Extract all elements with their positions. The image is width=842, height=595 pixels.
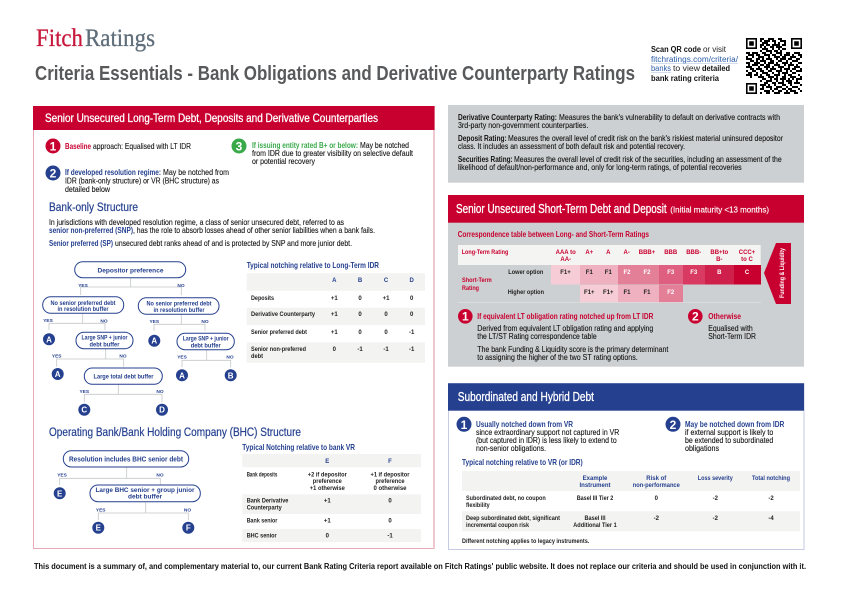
point 3: rated B+ or below: May be notched (360, 141, 409, 150)
point 1: baseline (46, 138, 191, 154)
flowchart: BHC structure: E (57, 489, 63, 498)
flowchart: bank-only structure: A (179, 371, 185, 380)
panel header: short-term debt: (Initial maturity <13 months) (670, 204, 769, 214)
table: long- and short-term correspondence: Long-Term Rating (462, 250, 509, 256)
table: typical notching relative to VR or IDR: incremental coupon risk (466, 523, 530, 529)
table: typical notching relative to bank VR: +1 (324, 499, 331, 505)
table: long- and short-term correspondence: AA- (560, 257, 571, 263)
table: long- and short-term correspondence: to C (741, 257, 753, 263)
flowchart: bank-only structure: A (46, 335, 52, 344)
table: typical notching relative to VR or IDR: flexibility (466, 503, 490, 509)
panel: rating definitions: Deposit Rating: (458, 134, 507, 143)
table: long- and short-term correspondence: F1+ (603, 290, 614, 296)
table: typical notching relative to long-term IDR: +1 (331, 312, 338, 318)
point 2: otherwise (688, 309, 756, 341)
panel: rating definitions: Measures the overall level of credit risk of the securities, including an assessment of the (514, 155, 782, 164)
table: typical notching relative to bank VR: 0 (388, 499, 392, 505)
flowchart: bank-only structure: NO (119, 354, 127, 360)
flowchart: bank-only structure: NO (177, 283, 185, 289)
table: typical notching relative to long-term IDR: C (384, 278, 389, 284)
flowchart: bank-only structure: Large total debt buffer (94, 374, 154, 380)
point 1: equivalent LT obligation rating: 1 (462, 310, 469, 324)
table: typical notching relative to VR or IDR: Typical notching relative to VR (or IDR) (462, 458, 583, 467)
table: typical notching relative to bank VR: Typical Notching relative to bank VR (242, 442, 355, 452)
heading: operating bank / BHC structure: Operating Bank/Bank Holding Company (BHC) Structure (49, 425, 301, 439)
point 2: developed resolution regime (46, 166, 229, 194)
panel: rating definitions: class. It includes an assessment of both default risk and potential recovery. (458, 142, 685, 151)
point 1: equivalent LT obligation rating: Derived from equivalent LT obligation rating and applying (477, 324, 653, 333)
table: typical notching relative to bank VR (242, 442, 421, 542)
table: long- and short-term correspondence: CCC+ (739, 250, 756, 256)
table: long- and short-term correspondence: F2 (623, 270, 631, 276)
table: typical notching relative to bank VR: Bank deposits (247, 472, 278, 478)
logo: Fitch Ratings (36, 25, 155, 52)
flowchart: bank-only structure: YES (52, 354, 62, 360)
table: typical notching relative to long-term IDR: Derivative Counterparty (251, 312, 316, 318)
table: typical notching relative to VR or IDR: Basel III Tier 2 (577, 496, 614, 502)
logo: Fitch Ratings: Fitch (36, 25, 83, 52)
table: typical notching relative to VR or IDR: -2 (768, 496, 774, 502)
point 1: baseline: approach: Equalised with LT IDR (93, 142, 191, 151)
table: long- and short-term correspondence: F1 (643, 290, 651, 296)
table: typical notching relative to long-term IDR: +1 (331, 296, 338, 302)
table: typical notching relative to VR or IDR: -2 (654, 516, 660, 522)
table: long- and short-term correspondence: F1+ (560, 270, 571, 276)
flowchart: bank-only structure: YES (149, 319, 160, 325)
point 3: rated B+ or below: from IDR due to greater visibility on selective default (252, 149, 414, 158)
table: typical notching relative to VR or IDR: Risk of (646, 476, 667, 482)
panel: rating definitions: likelihood of default/non-performance and, only for long-term ratings, of potential recoveries (458, 163, 742, 172)
point 2: otherwise: Otherwise (708, 312, 741, 321)
table: typical notching relative to long-term IDR: D (410, 278, 415, 284)
text block: bank-only structure (49, 218, 375, 248)
panel: rating definitions: 3rd-party non-government counterparties. (458, 121, 588, 130)
flowchart: BHC structure: YES (96, 508, 106, 514)
flowchart: bank-only structure: NO (226, 355, 234, 361)
table: long- and short-term correspondence: F3 (690, 270, 698, 276)
panel header: long-term debt: Senior Unsecured Long-Term Debt, Deposits and Derivative Counterparties (45, 111, 378, 125)
table: typical notching relative to VR or IDR: Subordinated debt, no coupon (466, 496, 546, 502)
point 2: developed resolution regime: IDR (bank-only structure) or VR (BHC structure) as (65, 176, 219, 186)
point 1: equivalent LT obligation rating (458, 309, 669, 362)
table: typical notching relative to long-term IDR: B (358, 278, 363, 284)
text block: bank-only structure: , has the role to absorb losses ahead of other senior liabilities when a bank fails. (133, 226, 375, 235)
panel: rating definitions (448, 105, 804, 183)
point 1: usually notched down from VR: (but captured in IDR) is less likely to extend to (476, 436, 617, 445)
table: long- and short-term correspondence: F1 (605, 270, 612, 276)
point 2: otherwise: 2 (692, 310, 699, 324)
flowchart: bank-only structure: C (81, 406, 87, 415)
table: long- and short-term correspondence: F2 (643, 270, 651, 276)
table: long- and short-term correspondence: F1 (586, 270, 593, 276)
panel: senior unsecured long-term debt (33, 106, 435, 549)
flowchart: bank-only structure: in resolution buffer (58, 307, 109, 313)
flowchart: bank-only structure: A (55, 370, 61, 379)
text block: bank-only structure: senior non-preferred (SNP) (49, 226, 133, 235)
table: long- and short-term correspondence: C (745, 270, 750, 276)
text block: bank-only structure: In jurisdictions with developed resolution regime, a class of senior unsecured debt, referred to as (49, 218, 344, 227)
table: typical notching relative to long-term IDR: Typical notching relative to Long-Term IDR (247, 260, 379, 270)
panel header: short-term debt: Senior Unsecured Short-Term Debt and Deposit (456, 201, 667, 216)
table: long- and short-term correspondence: Lower option (508, 270, 544, 276)
table: typical notching relative to long-term IDR: -1 (409, 347, 415, 353)
table: long- and short-term correspondence: Short-Term (462, 278, 492, 284)
panel: short-term debt and deposit (448, 195, 804, 367)
flowchart: bank-only structure (43, 262, 237, 416)
QR code caption: banks (651, 63, 671, 73)
point 3: rated B+ or below: 3 (236, 140, 243, 154)
point 1: usually notched down from VR (456, 417, 619, 453)
table: long- and short-term correspondence: A (606, 250, 611, 256)
flowchart: BHC structure: F (186, 524, 191, 533)
flowchart: bank-only structure: No senior preferred debt (50, 301, 116, 307)
point 2: may be notched down from IDR (666, 417, 784, 453)
table: long- and short-term correspondence: BB+to (710, 250, 729, 256)
table: long- and short-term correspondence: AAA to (556, 250, 576, 256)
table: typical notching relative to VR or IDR: Example (583, 476, 608, 482)
table: typical notching relative to bank VR: 0 (326, 534, 330, 540)
QR code caption: detailed (702, 63, 730, 73)
table: typical notching relative to bank VR: 0 otherwise (374, 486, 407, 492)
point 2: may be notched down from IDR: 2 (670, 418, 677, 432)
table: typical notching relative to VR or IDR: Total notching (752, 476, 790, 482)
table: typical notching relative to long-term IDR: Senior preferred debt (251, 330, 307, 336)
table: long- and short-term correspondence: BBB (664, 250, 678, 256)
arrow: funding and liquidity: Funding & Liquidity (779, 248, 786, 298)
flowchart: BHC structure: NO (184, 508, 191, 514)
table: long- and short-term correspondence: B- (716, 257, 722, 263)
panel header: long-term debt (33, 106, 434, 130)
text block: bank-only structure: unsecured debt ranks ahead of and is protected by SNP and more junior debt. (115, 239, 352, 248)
panel header: short-term debt (448, 195, 804, 223)
point 1: usually notched down from VR: Usually notched down from VR (476, 420, 573, 429)
table: typical notching relative to long-term IDR: 0 (358, 330, 362, 336)
flowchart: BHC structure: Large BHC senior + group junior (96, 487, 195, 494)
table: typical notching relative to bank VR: Bank Derivative (247, 499, 289, 505)
QR code caption: fitchratings.com/criteria/ (651, 54, 739, 64)
point 2: developed resolution regime: May be notched from (163, 168, 229, 177)
flowchart: bank-only structure: NO (156, 389, 164, 395)
point 2: developed resolution regime: detailed below (65, 185, 110, 194)
table: long- and short-term correspondence: A+ (585, 250, 594, 256)
point 2: developed resolution regime: 2 (50, 166, 57, 180)
panel: rating definitions: Measures the bank's vulnerability to default on derivative contracts with (559, 113, 780, 122)
table: typical notching relative to long-term IDR: -1 (383, 347, 389, 353)
table: typical notching relative to bank VR: F (388, 459, 392, 465)
arrow: funding and liquidity (764, 243, 791, 304)
table: typical notching relative to bank VR: BHC senior (247, 534, 277, 540)
flowchart: bank-only structure: Large SNP + junior (183, 336, 229, 342)
point 2: otherwise: Equalised with (708, 324, 753, 333)
table: typical notching relative to bank VR: +2 if depositor (308, 472, 347, 478)
panel header: subordinated debt: Subordinated and Hybrid Debt (458, 389, 594, 404)
flowchart: bank-only structure: A (151, 337, 157, 346)
table: typical notching relative to bank VR: Counterparty (247, 506, 282, 512)
table: typical notching relative to bank VR: +1 (324, 519, 331, 525)
point 1: usually notched down from VR: non-senior obligations. (476, 444, 546, 453)
flowchart: bank-only structure: YES (79, 389, 90, 395)
table: typical notching relative to long-term IDR: 0 (384, 312, 388, 318)
table: long- and short-term correspondence: F1+ (584, 290, 595, 296)
flowchart: BHC structure: debt buffer (128, 494, 162, 501)
QR code caption: or visit (703, 44, 727, 54)
point 2: may be notched down from IDR: May be notched down from IDR (685, 420, 784, 429)
flowchart: BHC structure: Resolution includes BHC senior debt (69, 457, 184, 464)
table: typical notching relative to VR or IDR: 0 (655, 496, 659, 502)
table: typical notching relative to long-term IDR: 0 (384, 330, 388, 336)
flowchart: bank-only structure: B (228, 371, 234, 380)
table: typical notching relative to bank VR: E (325, 459, 329, 465)
panel: rating definitions: Measures the overall level of credit risk on the bank's riskiest material uninsured depositor (508, 134, 783, 143)
table: typical notching relative to VR or IDR: -2 (713, 496, 719, 502)
panel: subordinated and hybrid debt (448, 383, 804, 550)
point 1: equivalent LT obligation rating: If equivalent LT obligation rating notched up from LT IDR (477, 312, 653, 321)
point 2: developed resolution regime: If developed resolution regime: (65, 168, 161, 177)
QR code caption: bank rating criteria (651, 73, 719, 83)
flowchart: bank-only structure: No senior preferred debt (146, 302, 212, 308)
flowchart: BHC structure: NO (156, 473, 164, 479)
QR code caption (651, 44, 739, 83)
table: long- and short-term correspondence: F3 (667, 270, 675, 276)
table: typical notching relative to VR or IDR (462, 458, 800, 545)
flowchart: bank-only structure: NO (100, 318, 108, 324)
heading: bank-only structure: Bank-only Structure (49, 200, 138, 214)
table: typical notching relative to bank VR: 0 (388, 519, 392, 525)
table: long- and short-term correspondence (458, 245, 761, 303)
table: typical notching relative to long-term IDR: A (332, 278, 337, 284)
table: typical notching relative to VR or IDR: Instrument (579, 483, 611, 489)
panel header: subordinated debt (448, 383, 804, 411)
flowchart: bank-only structure: YES (43, 318, 54, 324)
point 3: rated B+ or below (232, 138, 414, 166)
table: typical notching relative to VR or IDR: -4 (768, 516, 774, 522)
flowchart: bank-only structure: Depositor preference (98, 267, 164, 274)
QR code caption: Scan QR code (651, 44, 701, 54)
point 3: rated B+ or below: or potential recovery (252, 157, 315, 166)
table: typical notching relative to VR or IDR: Basel III (584, 516, 606, 522)
table: typical notching relative to long-term IDR: Senior non-preferred (251, 347, 306, 353)
table: typical notching relative to VR or IDR: -2 (713, 516, 719, 522)
table: typical notching relative to long-term IDR: 0 (410, 296, 414, 302)
table: long- and short-term correspondence: B (717, 270, 722, 276)
table: typical notching relative to VR or IDR: Deep subordinated debt, significant (466, 516, 560, 522)
flowchart: bank-only structure: debt buffer (191, 343, 221, 349)
panel: rating definitions: Derivative Counterparty Rating: (458, 113, 557, 122)
table: typical notching relative to bank VR: -1 (387, 534, 393, 540)
table: typical notching relative to long-term IDR: 0 (358, 312, 362, 318)
point 2: may be notched down from IDR: be extended to subordinated (685, 436, 773, 445)
table: long- and short-term correspondence: F2 (667, 290, 675, 296)
point 1: usually notched down from VR: 1 (461, 418, 468, 432)
QR code caption: to view (673, 63, 701, 73)
point 1: usually notched down from VR: since extraordinary support not captured in VR (476, 428, 619, 437)
table: typical notching relative to VR or IDR: Additional Tier 1 (573, 523, 617, 529)
point 1: equivalent LT obligation rating: to assigning the higher of the two ST rating options. (477, 353, 638, 362)
title: Criteria Essentials - Bank Obligations and Derivative Counterparty Ratings (35, 63, 635, 85)
table: typical notching relative to long-term IDR: +1 (331, 330, 338, 336)
table: typical notching relative to long-term IDR: Deposits (251, 296, 275, 302)
logo: Fitch Ratings: Ratings (85, 25, 155, 52)
table: typical notching relative to long-term IDR: 0 (358, 296, 362, 302)
table: typical notching relative to VR or IDR: non-performance (633, 483, 680, 489)
point 2: otherwise: Short-Term IDR (708, 332, 756, 341)
table: long- and short-term correspondence: F1 (623, 290, 631, 296)
flowchart: bank-only structure: NO (201, 319, 209, 325)
panel: rating definitions: Securities Rating: (458, 155, 513, 164)
point 2: may be notched down from IDR: obligations (685, 444, 719, 453)
table: long- and short-term correspondence: Rating (462, 286, 479, 292)
point 3: rated B+ or below: If issuing entity rated B+ or below: (252, 141, 358, 150)
table: typical notching relative to VR or IDR: Different notching applies to legacy instruments. (462, 539, 590, 545)
table: typical notching relative to long-term IDR: -1 (409, 330, 415, 336)
flowchart: BHC structure: E (96, 524, 102, 533)
flowchart: bank-only structure: Large SNP + junior (82, 336, 128, 342)
table: typical notching relative to VR or IDR: Loss severity (698, 476, 733, 482)
flowchart: bank-only structure: D (159, 406, 165, 415)
point 1: baseline: 1 (50, 140, 57, 154)
heading: correspondence table: Correspondence table between Long- and Short-Term Ratings (458, 230, 649, 239)
table: typical notching relative to bank VR: +1 otherwise (310, 486, 345, 492)
flowchart: bank-only structure: in resolution buffer (154, 308, 205, 314)
flowchart: BHC structure: YES (57, 473, 68, 479)
table: long- and short-term correspondence: BBB- (686, 250, 701, 256)
table: typical notching relative to bank VR: preference (313, 479, 342, 485)
point 2: may be notched down from IDR: if external support is likely to (685, 428, 774, 437)
icon: QR code (746, 38, 802, 94)
table: typical notching relative to long-term IDR: -1 (357, 347, 363, 353)
table: typical notching relative to long-term IDR: 0 (410, 312, 414, 318)
table: typical notching relative to long-term IDR: +1 (383, 296, 390, 302)
table: typical notching relative to bank VR: preference (376, 479, 405, 485)
flowchart: BHC structure (54, 451, 200, 534)
point 1: equivalent LT obligation rating: the LT/ST Rating correspondence table (477, 332, 597, 341)
table: long- and short-term correspondence: Higher option (508, 290, 544, 296)
point 1: equivalent LT obligation rating: The bank Funding & Liquidity score is the primary determinant (477, 345, 669, 354)
flowchart: bank-only structure: YES (177, 355, 188, 361)
table: typical notching relative to long-term IDR (247, 260, 425, 363)
table: typical notching relative to long-term IDR: 0 (333, 347, 337, 353)
table: typical notching relative to bank VR: Bank senior (247, 519, 278, 525)
table: typical notching relative to bank VR: +1 if depositor (370, 472, 410, 478)
flowchart: bank-only structure: debt buffer (90, 342, 120, 348)
flowchart: bank-only structure: YES (78, 283, 89, 289)
text block: bank-only structure: Senior preferred (SP) (49, 239, 113, 248)
table: long- and short-term correspondence: BBB+ (639, 250, 656, 256)
table: long- and short-term correspondence: A- (624, 250, 630, 256)
table: typical notching relative to long-term IDR: debt (251, 354, 263, 360)
point 1: baseline: Baseline (65, 142, 91, 151)
